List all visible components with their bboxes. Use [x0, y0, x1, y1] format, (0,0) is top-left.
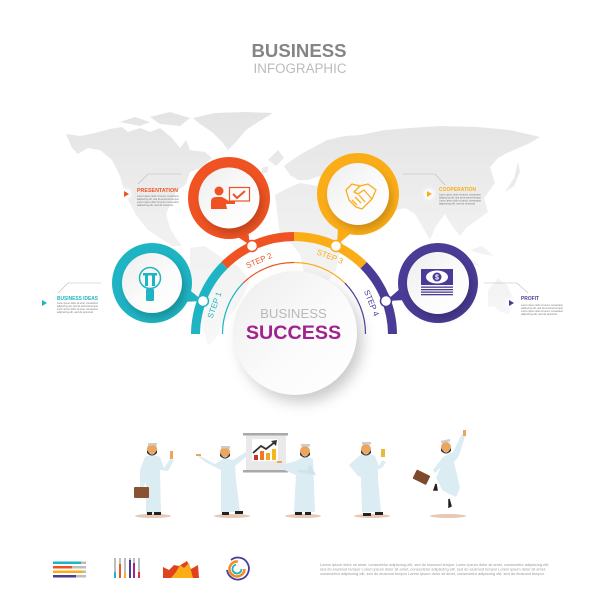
step labels: STEP 3: [315, 248, 345, 266]
callout: presentation: [120, 174, 181, 207]
callout: presentation: adipiscing elit, sed do eiusmod: [137, 203, 174, 207]
title: [251, 40, 347, 76]
callout: profit: adipiscing elit, sed do eiusmod tempor: [521, 306, 563, 310]
presentation board chart: [243, 433, 288, 472]
callout: cooperation: Lorem ipsum dolor sit amet, consectetur: [439, 192, 481, 196]
callout: cooperation: COOPERATION: [439, 187, 476, 193]
icon: banknotes: $: [435, 274, 439, 282]
callout: business ideas: adipiscing elit, sed do eiusmod: [57, 310, 94, 314]
figure: man with phone: [349, 442, 390, 518]
icon: radial chart: [227, 558, 249, 580]
callout: business ideas: [38, 283, 101, 314]
step 3 yellow segment: [294, 236, 364, 265]
figure: man at board: [277, 444, 321, 518]
footer text block: consectetur adipiscing elit, sed do eiusmod tempor Lorem ipsum dolor sit amet, consectetur adipiscing elit, sed do eiusmod tempor: [320, 572, 545, 576]
step labels: STEP 2: [245, 251, 274, 270]
footer text block: Lorem ipsum dolor sit amet, consectetur adipiscing elit, sed do eiusmod tempor Lorem ipsum dolor sit amet, consectetur adipiscing elit,: [320, 563, 549, 567]
icon: presenter with board: [211, 186, 250, 209]
title: INFOGRAPHIC: [254, 61, 347, 76]
figure: man with briefcase: [134, 443, 174, 518]
callout: cooperation: [403, 174, 481, 206]
main step arc: [196, 236, 392, 334]
node: yellow: [317, 153, 399, 252]
step labels: [206, 248, 381, 320]
footer text block: [320, 563, 549, 576]
callout: profit: adipiscing elit, sed do eiusmod: [521, 312, 558, 316]
callout: business ideas: adipiscing elit, sed do eiusmod tempor: [57, 304, 98, 308]
node: purple: [380, 243, 478, 323]
figure: man gesturing: [196, 446, 250, 518]
center circle: SUCCESS: [246, 322, 341, 344]
callout: presentation: Lorem ipsum dolor sit amet, consectetur: [137, 200, 179, 204]
title: BUSINESS: [251, 40, 347, 61]
world map: [66, 112, 540, 346]
center circle: BUSINESS: [260, 306, 327, 321]
icon: area chart: [163, 561, 199, 578]
callout: presentation: adipiscing elit, sed do eiusmod tempor: [137, 197, 179, 201]
callout: business ideas: Lorem ipsum dolor sit amet, consectetur: [57, 307, 98, 311]
node: orange: [188, 157, 270, 252]
inner thin arc: [222, 262, 366, 334]
callout: profit: PROFIT: [521, 296, 539, 302]
footer text block: sed do eiusmod tempor Lorem ipsum dolor sit amet, consectetur adipiscing elit, sed do eiusmod tempor Lorem ipsum dolor sit amet,: [320, 568, 546, 572]
icon: handshake: [346, 184, 376, 209]
center circle: [233, 271, 362, 402]
step 4 purple segment: [364, 265, 392, 334]
callout: presentation: Lorem ipsum dolor sit amet, consectetur: [137, 194, 179, 198]
step 2 orange segment: [224, 236, 294, 265]
callout: profit: [484, 283, 563, 316]
step labels: STEP 1: [206, 290, 224, 320]
icon: horizontal bars chart: [53, 562, 86, 578]
callout: profit: Lorem ipsum dolor sit amet, consectetur: [521, 309, 563, 313]
callout: cooperation: adipiscing elit, sed do eiusmod: [439, 202, 476, 206]
callout: business ideas: BUSINESS IDEAS: [57, 296, 99, 302]
step labels: STEP 4: [362, 289, 381, 318]
callout: profit: Lorem ipsum dolor sit amet, consectetur: [521, 303, 563, 307]
figure: jumping man: [413, 430, 466, 518]
callout: cooperation: Lorem ipsum dolor sit amet, consectetur: [439, 198, 481, 202]
step 1 teal segment: [196, 265, 224, 334]
icon: vertical bars chart: [114, 558, 140, 578]
callout: presentation: PRESENTATION: [137, 188, 178, 194]
callout: cooperation: adipiscing elit, sed do eiusmod tempor: [439, 196, 481, 200]
icon: light bulb: [140, 268, 160, 301]
node: teal: [112, 243, 208, 323]
callout: business ideas: Lorem ipsum dolor sit amet, consectetur: [57, 301, 98, 305]
